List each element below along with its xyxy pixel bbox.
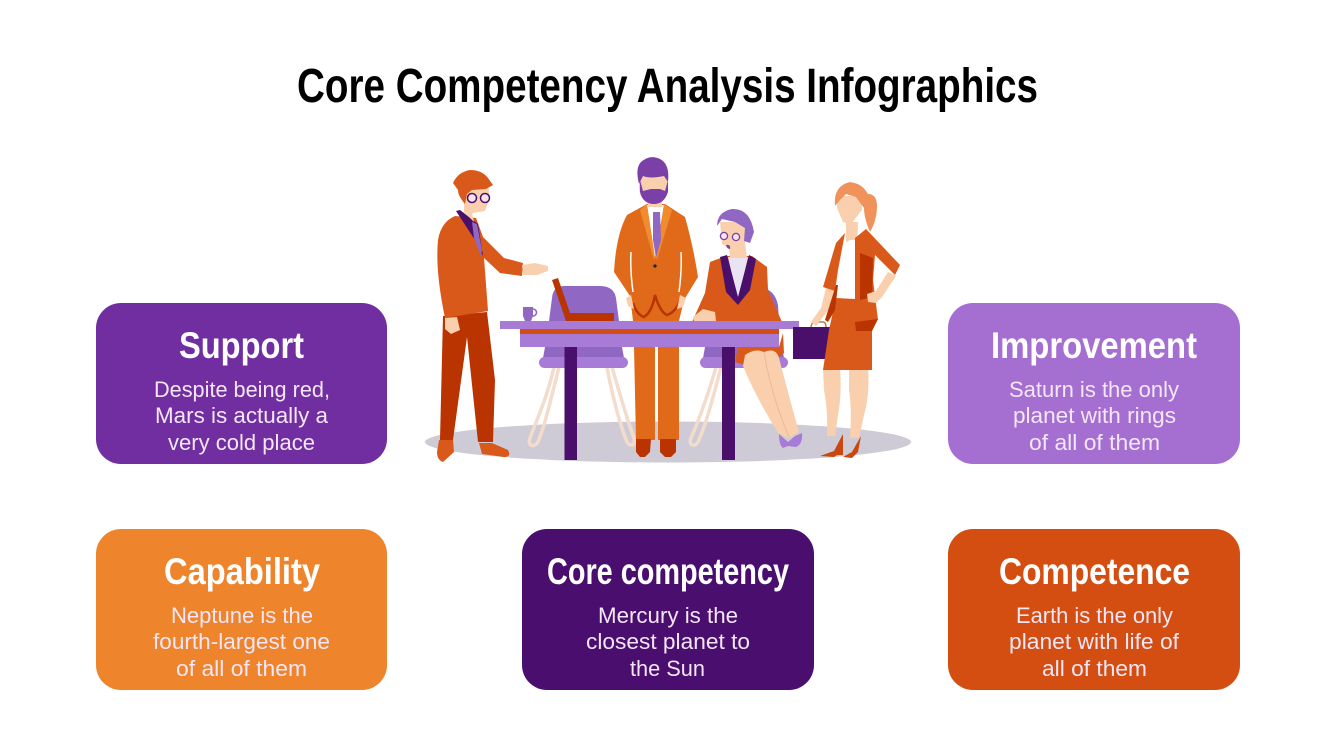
seated woman lower body [735, 333, 802, 448]
text: improvement description: planet with rings [1013, 403, 1176, 428]
text: capability description: fourth-largest one [153, 629, 330, 654]
illustration: business team at table [425, 157, 911, 463]
table [500, 321, 799, 460]
panel: support [96, 303, 387, 464]
text: competence description: all of them [1042, 656, 1147, 681]
coffee cup [523, 307, 536, 321]
text: core competency description: Mercury is the [598, 603, 738, 628]
laptop [552, 278, 614, 321]
seated woman upper body [692, 209, 782, 322]
panel: capability [96, 529, 387, 690]
title: Core Competency Analysis Infographics [297, 60, 1038, 113]
text: competence description [1009, 603, 1180, 681]
text: improvement description: Saturn is the only [1009, 377, 1179, 402]
text: support description: Despite being red, [154, 377, 330, 402]
text: improvement description [1009, 377, 1179, 455]
heading: competence: Competence [999, 551, 1190, 592]
text: competence description: Earth is the only [1016, 603, 1173, 628]
text: core competency description [586, 603, 750, 681]
man with glasses [437, 170, 548, 462]
text: core competency description: closest planet to [586, 629, 750, 654]
heading: capability: Capability [164, 551, 320, 592]
panel: competence [948, 529, 1240, 690]
bearded man [614, 157, 698, 457]
text: capability description [153, 603, 330, 681]
floor shadow [425, 422, 911, 462]
text: support description: Mars is actually a [155, 403, 329, 428]
panel: core competency [522, 529, 814, 690]
text: support description: very cold place [168, 430, 315, 455]
text: core competency description: the Sun [630, 656, 705, 681]
handbag [793, 322, 830, 359]
heading: support: Support [179, 325, 304, 366]
text: capability description: Neptune is the [171, 603, 313, 628]
heading: core competency: Core competency [547, 551, 789, 592]
panel: improvement [948, 303, 1240, 464]
text: support description [154, 377, 330, 455]
standing woman [811, 182, 900, 458]
text: improvement description: of all of them [1029, 430, 1160, 455]
left chair [529, 286, 634, 445]
heading: improvement: Improvement [991, 325, 1197, 366]
right chair [690, 287, 788, 445]
text: competence description: planet with life of [1009, 629, 1180, 654]
text: capability description: of all of them [176, 656, 307, 681]
